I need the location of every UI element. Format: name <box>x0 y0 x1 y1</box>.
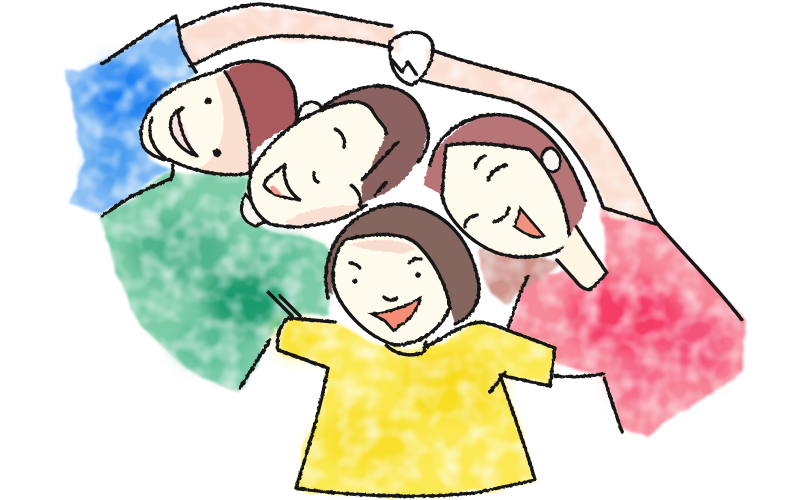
right woman hair <box>424 115 586 240</box>
arm: woman's raised arm <box>420 50 655 222</box>
outline: man arm and shoulder <box>102 4 392 72</box>
arms <box>180 6 655 222</box>
right woman ear <box>539 146 563 174</box>
wash: neck shadow <box>478 248 560 304</box>
outline: man torso <box>102 165 173 216</box>
outline: far arm <box>490 372 604 392</box>
colour washes <box>66 20 744 436</box>
child neck <box>386 342 426 355</box>
mother hair <box>322 86 427 205</box>
wash: yellow shirt <box>278 318 555 498</box>
child hair <box>324 204 478 324</box>
mother head <box>241 86 428 227</box>
wash: pink shirt <box>508 205 744 436</box>
mother ear top <box>298 102 322 125</box>
arm: man's raised arm <box>180 6 398 66</box>
wash: green shirt <box>100 172 338 394</box>
outline: pink shirt <box>508 222 742 432</box>
child head <box>324 204 479 355</box>
heads <box>140 61 607 355</box>
man head <box>140 61 297 175</box>
right woman head <box>424 115 586 257</box>
outline: yellow shirt <box>277 318 555 496</box>
wash: blue shirt <box>66 20 196 214</box>
man hair <box>225 62 297 155</box>
outline: woman's arm <box>420 50 656 224</box>
forearm resting by neck <box>557 223 607 290</box>
outline: child's raised fingers and lower arm <box>240 292 300 388</box>
ink outlines of bodies <box>102 4 742 496</box>
mother ear bottom <box>241 195 268 226</box>
outline: fist <box>390 32 433 85</box>
